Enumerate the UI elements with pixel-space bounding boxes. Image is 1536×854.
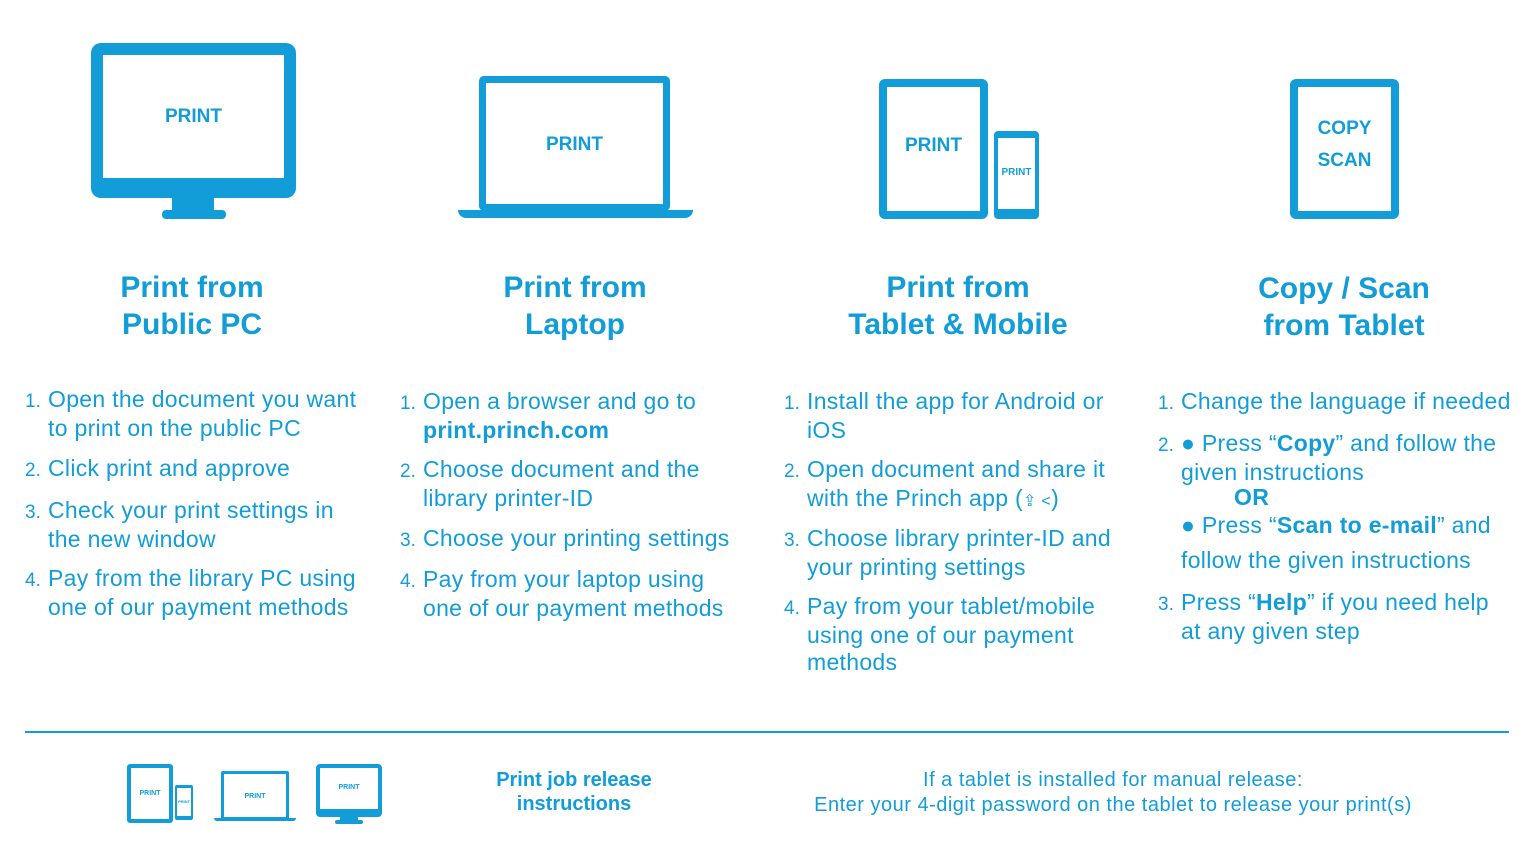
steps: copy/scan: [1158, 388, 1511, 644]
steps: tablet & mobile: Pay from your tablet/mobile: [807, 593, 1095, 619]
title: copy/scan: Copy / Scan: [1258, 272, 1430, 305]
icons: small devices: PRINT: [140, 790, 160, 797]
steps: tablet & mobile: Open document and share it: [807, 456, 1105, 482]
title: laptop: Print from: [503, 271, 647, 304]
steps: tablet & mobile: Choose library printer-ID and: [807, 525, 1111, 551]
icons: small devices: PRINT: [338, 784, 360, 791]
steps: tablet & mobile: using one of our payment: [807, 622, 1074, 648]
title: copy/scan: from Tablet: [1263, 309, 1425, 342]
icon: laptop: PRINT: [546, 134, 603, 155]
steps: copy/scan: at any given step: [1181, 618, 1360, 644]
text: tablet release note: Enter your 4-digit password on the tablet to release your print(s): [814, 794, 1412, 816]
steps: public pc: the new window: [48, 526, 216, 552]
steps: copy/scan: Press “Help” if you need help: [1181, 589, 1489, 615]
steps: tablet & mobile: 2.: [784, 461, 800, 482]
steps: public pc: [25, 386, 356, 620]
title: copy/scan: [1258, 272, 1430, 342]
icon: tablet and phone: PRINT: [905, 135, 962, 156]
steps: public pc: Check your print settings in: [48, 497, 334, 523]
steps: laptop: Choose document and the: [423, 456, 700, 482]
steps: tablet & mobile: 4.: [784, 598, 800, 619]
icon: copy/scan tablet: [1290, 79, 1399, 219]
steps: public pc: 4.: [25, 570, 41, 591]
steps: laptop: one of our payment methods: [423, 595, 724, 621]
text: tablet release note: [814, 769, 1412, 816]
steps: laptop: Open a browser and go to: [423, 388, 696, 414]
steps: copy/scan: 1.: [1158, 393, 1174, 414]
steps: copy/scan: OR: [1234, 484, 1269, 510]
steps: tablet & mobile: 1.: [784, 393, 800, 414]
title: tablet & mobile: [848, 271, 1068, 341]
title: public pc: [120, 271, 264, 341]
steps: tablet & mobile: iOS: [807, 417, 846, 443]
steps: public pc: to print on the public PC: [48, 415, 301, 441]
icons: small devices: PRINT: [178, 799, 190, 804]
steps: public pc: 3.: [25, 502, 41, 523]
steps: tablet & mobile: 3.: [784, 530, 800, 551]
text: print job release: Print job release: [496, 769, 652, 791]
steps: laptop: 4.: [400, 571, 416, 592]
title: laptop: Laptop: [525, 308, 625, 341]
title: tablet & mobile: Print from: [886, 271, 1030, 304]
text: print job release: [496, 769, 652, 815]
steps: tablet & mobile: with the Princh app (⇪ <): [807, 485, 1059, 511]
steps: laptop: 2.: [400, 461, 416, 482]
steps: copy/scan: follow the given instructions: [1181, 547, 1471, 573]
steps: tablet & mobile: your printing settings: [807, 554, 1026, 580]
icon: tablet and phone: [879, 79, 1039, 219]
steps: public pc: Click print and approve: [48, 455, 290, 481]
steps: tablet & mobile: [784, 388, 1111, 675]
icon: laptop: [458, 76, 693, 218]
steps: laptop: print.princh.com: [423, 417, 609, 443]
icon: desktop monitor: PRINT: [165, 106, 222, 127]
icons: small devices: PRINT: [244, 793, 266, 800]
steps: laptop: Choose your printing settings: [423, 525, 730, 551]
text: tablet release note: If a tablet is installed for manual release:: [923, 769, 1303, 791]
steps: public pc: Open the document you want: [48, 386, 356, 412]
steps: laptop: Pay from your laptop using: [423, 566, 704, 592]
steps: laptop: library printer-ID: [423, 485, 593, 511]
steps: public pc: one of our payment methods: [48, 594, 349, 620]
icon: copy/scan tablet: COPY: [1318, 118, 1371, 139]
icon: copy/scan tablet: SCAN: [1318, 150, 1371, 171]
text: print job release: instructions: [517, 793, 631, 815]
steps: laptop: 1.: [400, 393, 416, 414]
steps: laptop: [400, 388, 730, 621]
steps: tablet & mobile: methods: [807, 649, 897, 675]
steps: laptop: 3.: [400, 530, 416, 551]
icons: small devices: [127, 764, 382, 824]
icon: desktop monitor: [91, 43, 296, 219]
title: tablet & mobile: Tablet & Mobile: [848, 308, 1068, 341]
steps: public pc: 1.: [25, 391, 41, 412]
steps: copy/scan: given instructions: [1181, 459, 1364, 485]
steps: copy/scan: ● Press “Scan to e-mail” and: [1181, 512, 1491, 538]
title: public pc: Public PC: [122, 308, 262, 341]
steps: copy/scan: ● Press “Copy” and follow the: [1181, 430, 1496, 456]
steps: copy/scan: 3.: [1158, 594, 1174, 615]
steps: public pc: 2.: [25, 460, 41, 481]
title: public pc: Print from: [120, 271, 264, 304]
steps: copy/scan: 2.: [1158, 435, 1174, 456]
steps: public pc: Pay from the library PC using: [48, 565, 356, 591]
steps: tablet & mobile: Install the app for Android or: [807, 388, 1104, 414]
title: laptop: [503, 271, 647, 341]
steps: copy/scan: Change the language if needed: [1181, 388, 1511, 414]
icon: tablet and phone: PRINT: [1002, 167, 1032, 178]
